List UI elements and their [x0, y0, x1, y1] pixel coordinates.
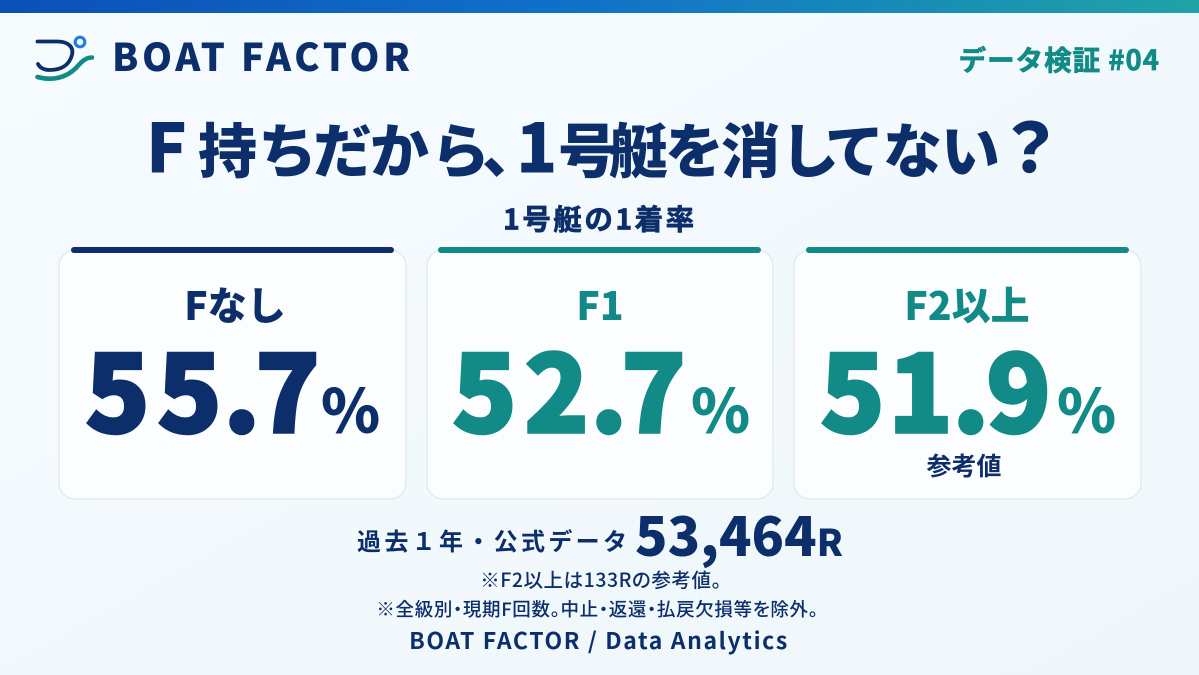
title: 号艇を消してない: [558, 104, 1000, 190]
title: F: [146, 94, 187, 192]
panel: F2 or more: [794, 247, 1141, 499]
value: %: [1057, 364, 1116, 450]
panel label: F1: [576, 276, 624, 332]
value: 51.9: [820, 308, 1051, 464]
series tag: データ検証 #04: [959, 38, 1160, 78]
panel label: F2以上: [904, 276, 1030, 332]
sample size: 53,464R: [635, 495, 843, 572]
panel label: Fなし: [184, 276, 286, 332]
logo: [38, 27, 410, 82]
value: 52.7: [452, 308, 686, 464]
footnote 2: ※全級別・現期F回数。中止・返還・払戻欠損等を除外。: [376, 596, 819, 622]
panel: F1: [427, 247, 773, 499]
logo wordmark: BOAT FACTOR: [112, 27, 410, 82]
reference note: 参考値: [926, 447, 1002, 483]
value: 55.7: [85, 308, 320, 464]
value: %: [321, 364, 380, 450]
sample size: 過去１年・公式データ: [357, 522, 627, 557]
title: ？: [996, 94, 1064, 192]
credit: BOAT FACTOR / Data Analytics: [409, 622, 789, 656]
top gradient bar: [0, 0, 1199, 13]
chart subtitle: 1号艇の1着率: [503, 198, 697, 238]
title: 持ちだから、: [198, 104, 541, 190]
value: %: [691, 364, 750, 450]
panel: F none: [59, 247, 406, 499]
icon: boat logo mark: [38, 37, 92, 79]
footnote 1: ※F2以上は133Rの参考値。: [480, 564, 722, 593]
title: 1: [516, 94, 557, 192]
sample size: [357, 495, 843, 572]
